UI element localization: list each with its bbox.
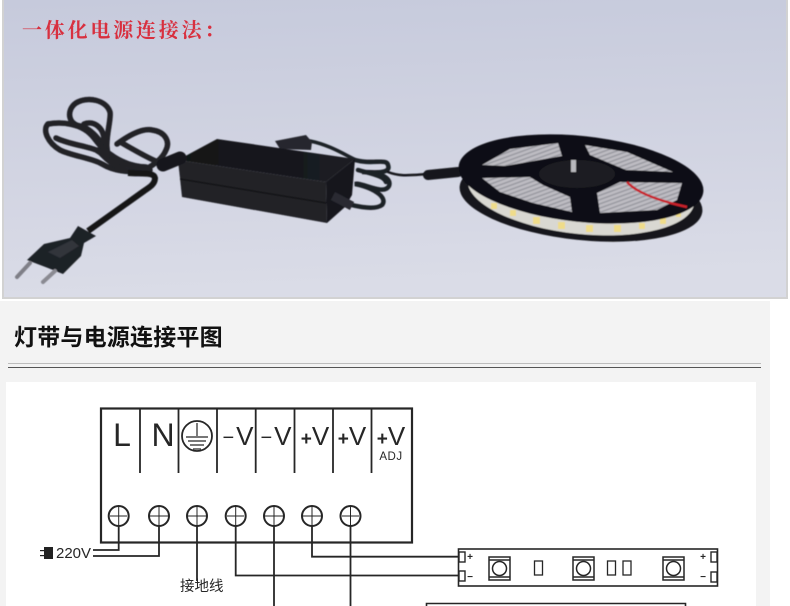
terminal labels: L — [113, 417, 131, 453]
power supply terminal block — [101, 408, 412, 542]
terminal labels: V — [274, 421, 292, 451]
strip solder pads — [459, 552, 717, 582]
terminal labels: +V — [338, 421, 367, 451]
adapter side — [326, 159, 355, 223]
strip polarity marks: − — [700, 572, 706, 583]
reel hub — [539, 160, 615, 188]
mains voltage label: 220V — [56, 545, 91, 562]
LED chips — [491, 203, 681, 232]
lower page background panel — [0, 301, 770, 606]
upper reel disc — [454, 123, 708, 235]
panel: wiring diagram — [6, 382, 756, 606]
LED strip diagram — [458, 549, 718, 586]
ferrite bead — [275, 135, 312, 150]
icon: power adapter with cables and plug — [17, 100, 428, 282]
heading divider — [8, 363, 761, 368]
adapter top — [178, 139, 355, 182]
plug pins — [17, 263, 30, 277]
reel windows — [482, 143, 682, 213]
strip polarity marks: + — [467, 552, 473, 563]
terminal labels: +V — [377, 421, 406, 451]
front cable loops — [46, 100, 167, 172]
terminal labels: − — [260, 427, 272, 449]
terminal labels: N — [151, 417, 175, 453]
cable output — [333, 196, 352, 206]
screw terminals — [109, 506, 360, 526]
terminal labels: ADJ — [379, 451, 403, 463]
lower reel disc — [455, 145, 707, 253]
icon: LED strip reel — [428, 123, 708, 253]
strain relief — [163, 158, 180, 165]
DC connector — [428, 172, 458, 175]
strip polarity marks: + — [700, 552, 706, 563]
strip polarity marks: − — [467, 572, 473, 583]
terminal labels: − — [222, 427, 234, 449]
adapter front — [178, 160, 327, 223]
red wire — [627, 182, 687, 207]
rear cable loops — [310, 141, 428, 208]
photo panel: power adapter and LED strip reel — [0, 0, 790, 300]
wiring — [93, 526, 459, 606]
section heading: 灯带与电源连接平图 — [14, 324, 223, 350]
ground wire label: 接地线 — [180, 578, 224, 595]
terminal labels — [113, 417, 406, 463]
LED strip band — [463, 136, 699, 246]
LED chips — [489, 557, 684, 580]
icon: earth symbol — [182, 421, 212, 451]
mains cord — [88, 173, 155, 231]
resistors — [534, 561, 631, 575]
terminal labels: +V — [301, 421, 330, 451]
terminal labels: V — [236, 421, 254, 451]
icon: mains plug — [40, 547, 53, 559]
plug body — [27, 226, 96, 274]
photo heading: 一体化电源连接法： — [22, 19, 227, 42]
second component box (cropped) — [426, 604, 686, 606]
strip polarity marks — [467, 552, 706, 583]
